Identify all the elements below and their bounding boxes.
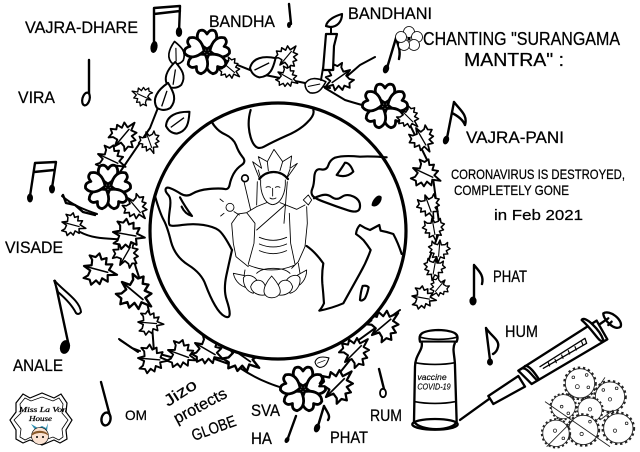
vine [62, 56, 440, 390]
logo face [31, 423, 48, 444]
icon: small flower [396, 26, 422, 50]
label: rum: RUM [370, 406, 402, 425]
note: rum [379, 369, 386, 397]
vial label: vaccine [417, 373, 447, 382]
music notes [27, 4, 498, 444]
caption word: protects: protects [171, 385, 230, 428]
face and hair [257, 180, 287, 223]
vial label: COVID-19 [417, 382, 451, 391]
vial label [417, 373, 451, 391]
flower: top left [183, 30, 231, 75]
wreath of leaves and flowers around the globe [59, 14, 453, 412]
heading line two: MANTRA" : [464, 50, 564, 70]
logo text: Miss La Von [18, 406, 68, 414]
note: ha [283, 416, 296, 444]
vaccine vial [412, 330, 458, 430]
note: phat right [469, 265, 483, 306]
staff [244, 182, 251, 210]
caption: jizo protects globe [161, 376, 239, 445]
heading line one: CHANTING "SURANGAMA [423, 29, 620, 49]
continents [155, 110, 402, 317]
globe [150, 103, 406, 359]
virus cluster [542, 368, 634, 447]
logo: miss la von house: House [28, 415, 52, 423]
label: ha: HA [251, 429, 273, 448]
left wreath leaves [59, 190, 155, 240]
note: hum [486, 328, 498, 366]
message text [451, 166, 625, 224]
jizo bodhisattva figure [220, 149, 312, 298]
flower: left [84, 165, 132, 210]
africa and asia [307, 225, 402, 311]
eurasia [311, 156, 387, 212]
label: phat right: PHAT [493, 267, 527, 286]
caption word: jizo: Jizo [161, 376, 200, 410]
caption word: globe: GLOBE [190, 413, 239, 445]
dark spot [373, 197, 381, 205]
right wreath leaves [393, 102, 453, 312]
label: vajra-pani: VAJRA-PANI [466, 128, 564, 147]
label: vajra-dhare: VAJRA-DHARE [25, 18, 138, 37]
robe and sleeves [232, 203, 307, 270]
candle [321, 14, 342, 80]
north america [166, 122, 244, 250]
crown [253, 149, 297, 178]
south america [155, 196, 232, 317]
greenland [249, 110, 314, 148]
label: bandhani: BANDHANI [348, 4, 432, 23]
label: hum: HUM [505, 322, 538, 341]
syringe [460, 312, 621, 420]
jewel in hand [220, 195, 312, 216]
bottom left wreath leaves [80, 217, 269, 383]
note: anale large eighth [54, 280, 81, 355]
lotus throne [243, 263, 300, 280]
label: vira: VIRA [18, 88, 56, 107]
message line two: COMPLETELY GONE [454, 182, 569, 198]
note: bandha [287, 4, 291, 28]
label: sva: SVA [251, 401, 281, 420]
label: om: OM [125, 407, 147, 423]
note: vajra-pani eighth [442, 102, 466, 145]
label: visade: VISADE [5, 238, 63, 257]
note: om half note [100, 382, 112, 426]
label: bandha: BANDHA [209, 12, 276, 31]
note: vajra-dhare beamed [150, 6, 182, 54]
date: in Feb 2021 [494, 207, 583, 224]
florida [180, 197, 192, 216]
heading: chanting surangama mantra [396, 26, 620, 70]
note: bandhani eighth [382, 38, 400, 74]
flower: bottom [279, 367, 327, 412]
note: left beamed [27, 162, 56, 202]
note: vira half note [81, 60, 91, 106]
bottom right wreath leaves [314, 301, 409, 409]
note: phat bottom [313, 406, 329, 433]
logo: miss la von house [10, 393, 72, 445]
madagascar [360, 286, 369, 301]
flower: top right [361, 84, 409, 129]
top wreath leaves [92, 39, 358, 180]
island [337, 163, 353, 176]
label: anale: ANALE [13, 356, 63, 375]
label: phat bottom: PHAT [330, 428, 368, 447]
